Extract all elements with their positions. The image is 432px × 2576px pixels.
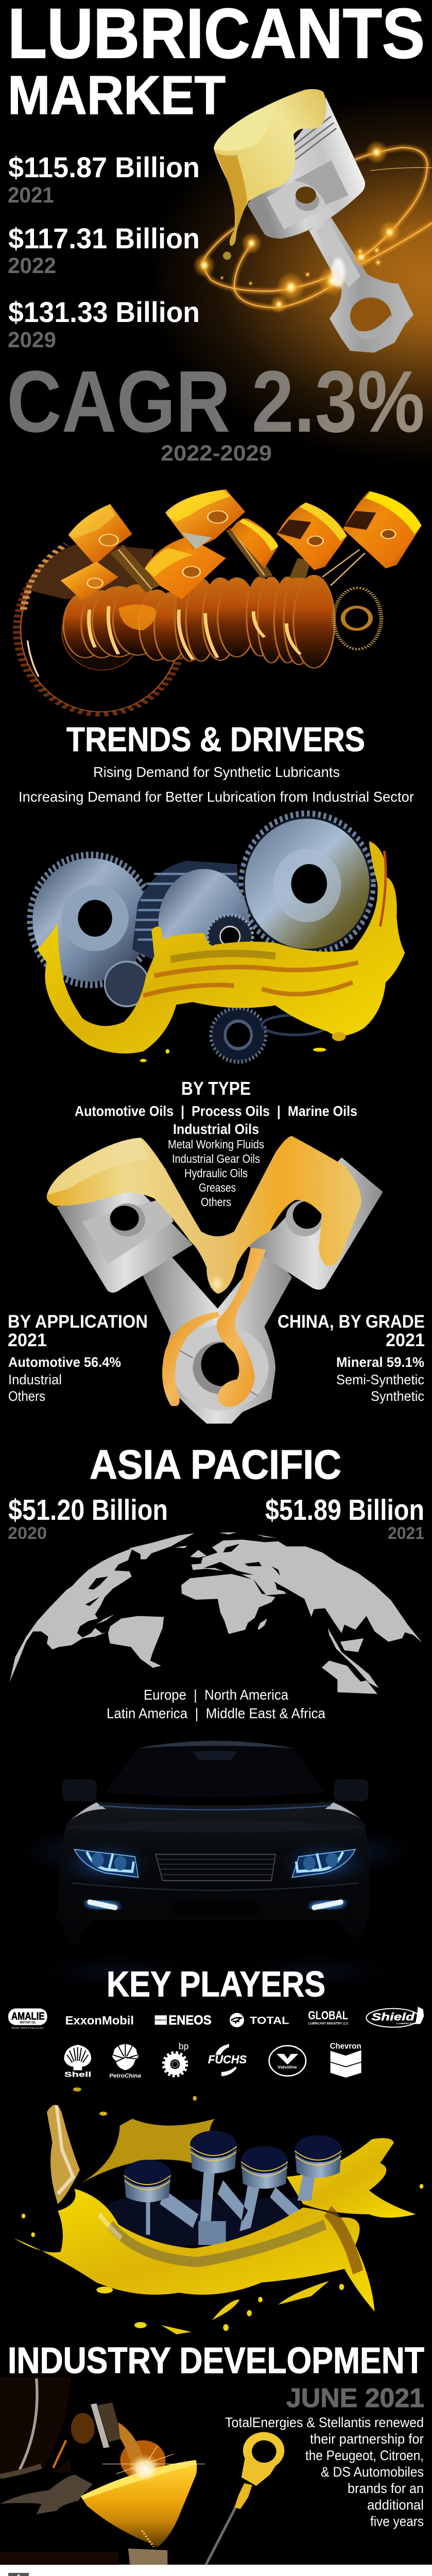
logo: amalie <box>8 2008 47 2030</box>
eurasia <box>192 1539 422 1642</box>
large timing gear <box>16 545 184 715</box>
market values <box>8 151 200 352</box>
left headlight <box>57 1839 155 1888</box>
funnel glow <box>120 2441 165 2480</box>
dark car with blue headlights <box>16 1741 416 1991</box>
by application: Industrial <box>8 1372 62 1387</box>
front pistons <box>68 504 132 565</box>
asia pacific: ASIA PACIFIC <box>90 1442 341 1487</box>
heading: trends and drivers: Rising Demand for Synthetic Lubricants <box>93 764 340 780</box>
asia pacific: 2020 <box>8 1523 47 1543</box>
funnel base <box>128 2549 167 2565</box>
title: MARKET <box>8 65 226 126</box>
by type text: Automotive Oils | Process Oils | Marine Oils <box>75 1103 357 1119</box>
june 2021 development text: brands for an <box>348 2481 424 2496</box>
north america <box>10 1548 132 1682</box>
asia pacific: 2021 <box>388 1523 424 1543</box>
by application: Automotive 56.4% <box>8 1354 121 1370</box>
market values: $115.87 Billion <box>8 151 200 183</box>
logo: exxonmobil: ExxonMobil <box>65 2013 134 2027</box>
by type text: Industrial Oils <box>173 1121 259 1137</box>
icon: fortune business insights logo <box>8 2573 29 2576</box>
rear disc <box>62 594 142 670</box>
crankshaft discs <box>63 575 335 668</box>
by application: 2021 <box>8 1330 47 1350</box>
rest of regions: Europe | North America <box>144 1687 288 1703</box>
logo: petrochina <box>109 2044 141 2079</box>
gear face top <box>30 543 154 599</box>
logos right half <box>208 2007 424 2078</box>
market values: 2022 <box>8 253 56 278</box>
oil pouring into funnel image <box>0 2377 284 2565</box>
logo: fuchs <box>208 2044 247 2076</box>
logos left half <box>8 2008 212 2079</box>
by type text <box>75 1078 357 1137</box>
logo: global: LUBRICANT INDUSTRY LLC <box>308 2022 349 2025</box>
china by grade: Mineral 59.1% <box>336 1354 424 1370</box>
heading: trends and drivers: Increasing Demand for Better Lubrication from Industrial Sector <box>19 789 414 805</box>
oil coating <box>214 89 326 246</box>
blue pistons <box>124 2131 341 2202</box>
logo: total: TOTAL <box>250 2015 289 2026</box>
front splash <box>14 2189 375 2312</box>
china by grade <box>278 1312 425 1404</box>
type sub-list: Industrial Gear Oils <box>172 1152 260 1165</box>
funnel <box>81 2460 197 2547</box>
logo: global: GLOBAL <box>308 2008 348 2022</box>
mirrors <box>62 1780 97 1801</box>
rest of regions: Latin America | Middle East & Africa <box>107 1705 325 1721</box>
logo: global <box>308 2008 349 2025</box>
flash <box>128 2454 162 2483</box>
connecting rods <box>110 526 312 592</box>
oil strands <box>162 1312 220 1406</box>
lower small gears <box>105 962 328 1062</box>
june 2021 development text: additional <box>367 2497 424 2513</box>
twin pistons with oil <box>47 1136 383 1423</box>
by application: Others <box>8 1388 45 1404</box>
right piston <box>245 1158 383 1290</box>
market values: 2021 <box>8 183 54 208</box>
june 2021 development text <box>225 2383 424 2529</box>
logo: shell: Shell <box>64 2070 91 2078</box>
arctic islands <box>175 1532 277 1557</box>
logo: shell <box>64 2045 91 2078</box>
gears and oil splash image <box>30 814 405 1062</box>
logo: shield: LUBRICANTS <box>396 2022 419 2025</box>
right headlight <box>275 1839 375 1888</box>
crank highlights <box>89 606 300 659</box>
background glow behind hero piston <box>144 90 432 466</box>
rods <box>146 2170 316 2245</box>
market values: $131.33 Billion <box>8 296 200 328</box>
june 2021 development text: five years <box>370 2514 424 2529</box>
grey tool <box>0 2475 93 2514</box>
logo: bp <box>163 2041 189 2076</box>
china by grade: Semi-Synthetic <box>336 1372 424 1387</box>
logo: shield <box>366 2007 424 2027</box>
oil stream <box>118 2422 143 2473</box>
by application <box>8 1312 148 1404</box>
heading: key players: KEY PLAYERS <box>107 1964 325 2004</box>
title <box>8 0 425 126</box>
heading: trends and drivers: TRENDS & DRIVERS <box>66 720 365 759</box>
greenland <box>129 1533 194 1560</box>
logo: chevron: Chevron <box>330 2042 361 2051</box>
bottle <box>0 2377 122 2483</box>
type sub-list <box>168 1138 264 1209</box>
pistons in oil splash image <box>14 2088 423 2334</box>
china by grade: Synthetic <box>371 1388 424 1404</box>
logo: fuchs: FUCHS <box>208 2053 247 2066</box>
australia <box>322 1660 377 1694</box>
oil coating <box>47 1136 361 1294</box>
headlight halos <box>16 1827 416 1991</box>
june 2021 development text: JUNE 2021 <box>286 2383 424 2413</box>
by application: BY APPLICATION <box>8 1312 148 1332</box>
logo: bp: bp <box>179 2041 189 2051</box>
golden engine crankshaft image <box>16 489 422 715</box>
type sub-list: Others <box>201 1195 231 1209</box>
logo: petrochina: PetroChina <box>109 2073 141 2079</box>
logo: amalie: Better than it has to be! <box>12 2027 44 2030</box>
june 2021 development text: their partnership for <box>310 2431 424 2447</box>
market values: 2029 <box>8 328 56 352</box>
gear right <box>241 814 373 954</box>
logo: eneos: ENEOS <box>168 2013 212 2027</box>
africa <box>181 1574 275 1634</box>
light rings <box>203 147 432 308</box>
logo: eneos: ENEOS <box>155 2019 166 2021</box>
car body <box>57 1802 370 1947</box>
central america islands <box>94 1614 114 1626</box>
world map <box>10 1532 422 1694</box>
pistons <box>61 489 422 601</box>
type sub-list: Metal Working Fluids <box>168 1138 264 1151</box>
piston body <box>247 98 365 239</box>
crankshaft <box>102 2197 300 2247</box>
rest of regions <box>107 1687 325 1721</box>
asia pacific: $51.20 Billion <box>8 1494 168 1527</box>
logo: shield: Shield <box>372 2012 415 2023</box>
type sub-list: Hydraulic Oils <box>184 1166 248 1180</box>
connecting rod <box>309 217 413 353</box>
market values: $117.31 Billion <box>8 222 200 255</box>
june 2021 development text: & DS Automobiles <box>321 2464 424 2480</box>
sparkles <box>193 140 401 314</box>
CAGR: 2022-2029 <box>161 441 272 466</box>
gear left <box>30 855 152 985</box>
back splash <box>47 2105 416 2218</box>
logo: valvoline <box>269 2046 306 2076</box>
roof and windshield <box>105 1741 325 1798</box>
logo: amalie: AMALIE <box>11 2010 45 2022</box>
footer <box>8 2573 424 2576</box>
type sub-list: Greases <box>199 1181 236 1194</box>
logo: valvoline: Valvoline <box>278 2065 297 2070</box>
gear middle <box>132 861 253 982</box>
asia pacific <box>8 1442 424 1543</box>
inland seas <box>85 1544 282 1606</box>
hero piston with oil and light rings <box>193 89 432 353</box>
south america <box>108 1616 164 1668</box>
left piston <box>57 1189 193 1293</box>
heading: trends and drivers <box>19 720 414 805</box>
grille <box>155 1854 275 1880</box>
by type text: BY TYPE <box>181 1078 251 1099</box>
fog lights <box>90 1902 341 1908</box>
china by grade: 2021 <box>386 1330 425 1350</box>
logo: amalie: MOTOR OIL <box>20 2021 36 2024</box>
yellow piston rings <box>69 504 116 538</box>
dipstick <box>206 2432 284 2565</box>
oil splash <box>37 841 405 1054</box>
logo: chevron <box>330 2042 361 2078</box>
rear pistons <box>145 537 226 599</box>
small gear <box>334 588 381 649</box>
southeast asia <box>328 1628 379 1688</box>
logo: total <box>230 2013 289 2027</box>
connecting rods <box>141 1248 292 1423</box>
